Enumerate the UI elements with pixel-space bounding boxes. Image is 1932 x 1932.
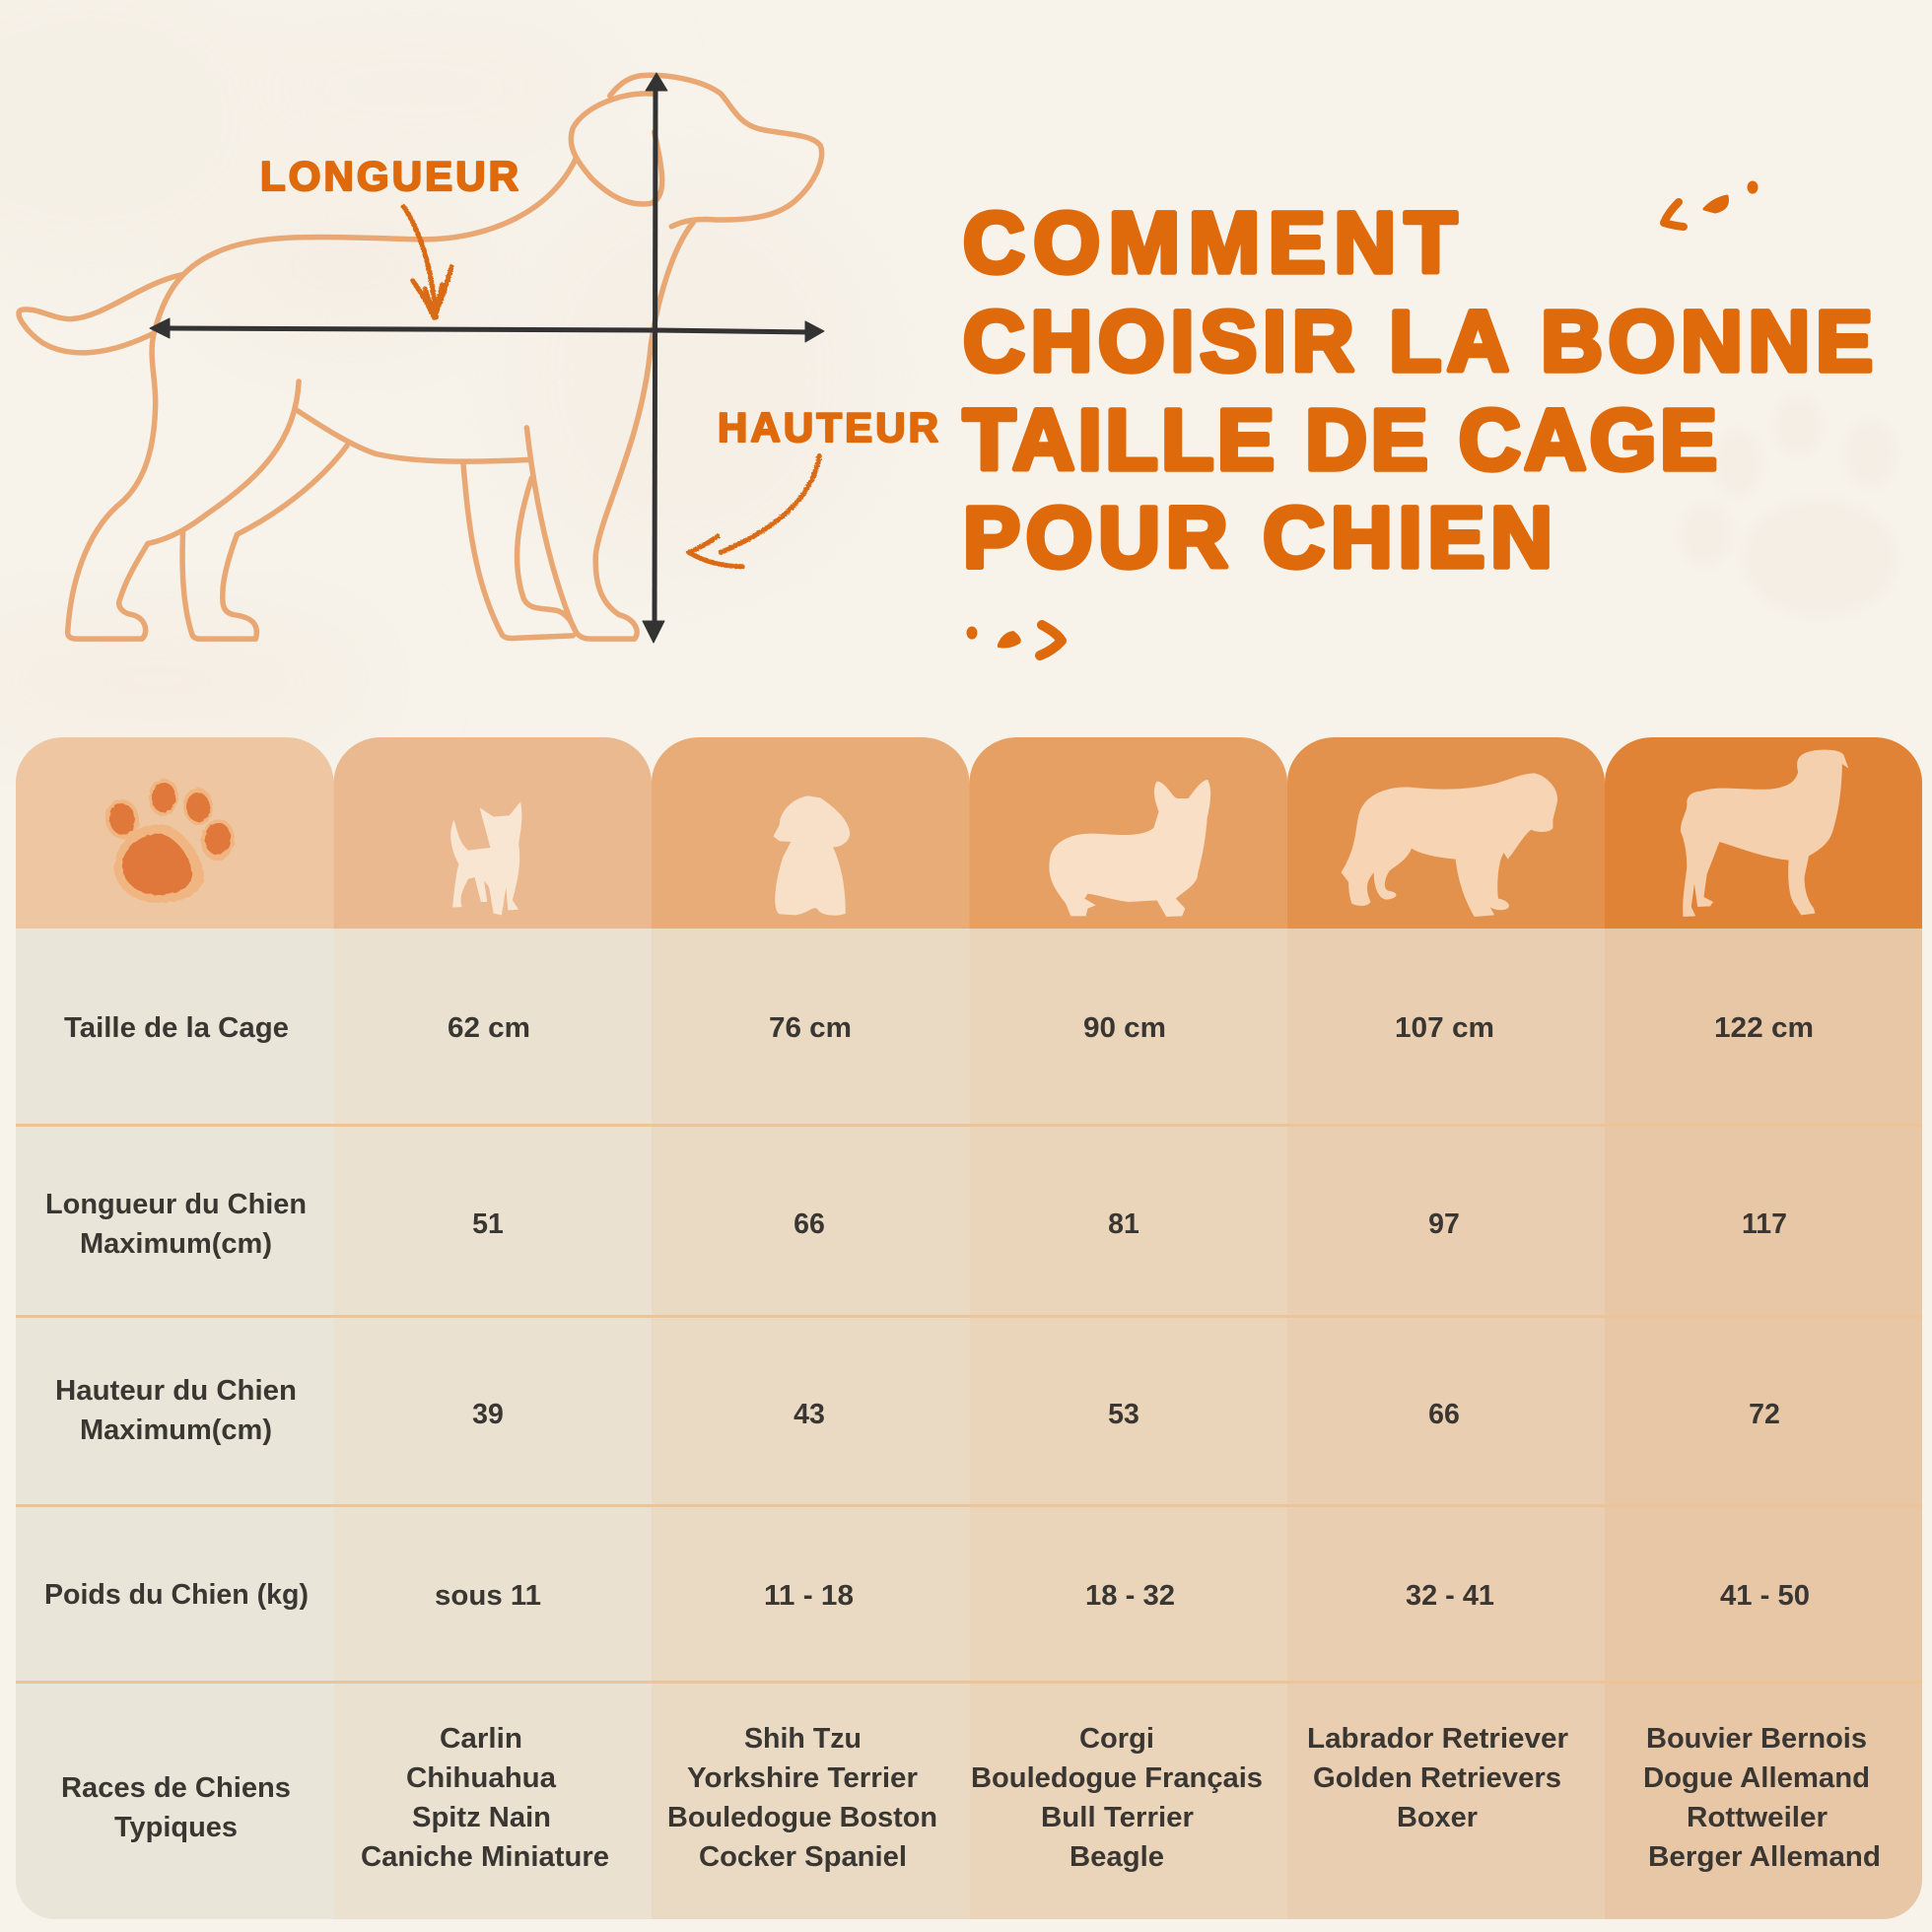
- decoration: bottom marks: [967, 625, 1062, 656]
- title: POUR CHIEN: [963, 490, 1552, 586]
- measurement arrows: [150, 73, 824, 643]
- header cell: labrador: [1287, 737, 1605, 929]
- decoration: top marks: [1664, 181, 1758, 227]
- row: races de chiens: Dogue Allemand: [1643, 1762, 1870, 1794]
- header cell: corgi: [970, 737, 1287, 929]
- row: poids du chien: sous 11: [435, 1580, 541, 1612]
- row: taille de la cage: 62 cm: [448, 1012, 530, 1044]
- row: races de chiens: Shih Tzu: [744, 1723, 862, 1755]
- row: races de chiens: Berger Allemand: [1648, 1841, 1881, 1873]
- header cell: large dog: [1605, 737, 1922, 929]
- icon: chihuahua silhouette: [450, 801, 521, 915]
- table header: [16, 737, 1922, 929]
- row: poids du chien: 41 - 50: [1720, 1580, 1810, 1612]
- row: races de chiens: Yorkshire Terrier: [687, 1762, 918, 1794]
- title: TAILLE DE CAGE: [963, 392, 1717, 488]
- row: taille de la cage: 76 cm: [769, 1012, 852, 1044]
- row: races de chiens: Beagle: [1070, 1841, 1164, 1873]
- row: longueur du chien: 117: [1742, 1208, 1787, 1240]
- arrow: hauteur: [689, 455, 819, 567]
- background paw watermark: [1680, 396, 1897, 617]
- row: longueur du chien: 97: [1428, 1208, 1460, 1240]
- title: [963, 195, 1873, 586]
- row: races de chiens: Corgi: [1079, 1723, 1154, 1755]
- row: hauteur du chien: 66: [1428, 1399, 1460, 1430]
- row: poids du chien: 18 - 32: [1085, 1580, 1175, 1612]
- icon: paw: [103, 778, 238, 903]
- row: hauteur du chien: [55, 1375, 1780, 1446]
- row: longueur du chien: 66: [794, 1208, 825, 1240]
- row: longueur du chien: [45, 1189, 1787, 1260]
- icon: large dog silhouette: [1681, 750, 1848, 917]
- row: poids du chien: 32 - 41: [1406, 1580, 1494, 1612]
- header cell: shih tzu: [652, 737, 970, 929]
- icon: corgi silhouette: [1049, 780, 1210, 917]
- row: poids du chien: 11 - 18: [764, 1580, 854, 1612]
- row: races de chiens: [61, 1723, 1881, 1873]
- row: taille de la cage: 90 cm: [1083, 1012, 1166, 1044]
- label: hauteur: HAUTEUR: [718, 404, 938, 450]
- header cell: paw: [16, 737, 334, 929]
- row: races de chiens: Boxer: [1397, 1802, 1478, 1833]
- row: races de chiens: Chihuahua: [406, 1762, 557, 1794]
- row: longueur du chien: Longueur du Chien: [45, 1189, 307, 1220]
- row: races de chiens: Bouledogue Français: [971, 1762, 1263, 1794]
- row: hauteur du chien: 39: [472, 1399, 504, 1430]
- row: races de chiens: Bull Terrier: [1041, 1802, 1194, 1833]
- title: CHOISIR LA BONNE: [963, 294, 1873, 389]
- row: poids du chien: [44, 1579, 1810, 1612]
- row: longueur du chien: 51: [472, 1208, 504, 1240]
- row: hauteur du chien: Hauteur du Chien: [55, 1375, 297, 1407]
- row: taille de la cage: 122 cm: [1714, 1012, 1814, 1044]
- row: races de chiens: Bouledogue Boston: [667, 1802, 937, 1833]
- title: COMMENT: [963, 195, 1457, 291]
- row: races de chiens: Labrador Retriever: [1307, 1723, 1568, 1755]
- row: races de chiens: Cocker Spaniel: [699, 1841, 907, 1873]
- row: races de chiens: Bouvier Bernois: [1646, 1723, 1867, 1755]
- row: races de chiens: Rottweiler: [1687, 1802, 1828, 1833]
- label: longueur: LONGUEUR: [260, 153, 518, 199]
- row: taille de la cage: Taille de la Cage: [64, 1012, 289, 1044]
- row: races de chiens: Caniche Miniature: [361, 1841, 609, 1873]
- row: hauteur du chien: 43: [794, 1399, 825, 1430]
- row: taille de la cage: 107 cm: [1395, 1012, 1494, 1044]
- row: hauteur du chien: Maximum(cm): [80, 1414, 272, 1446]
- row: races de chiens: Spitz Nain: [412, 1802, 551, 1833]
- arrow: longueur: [403, 206, 451, 317]
- row: hauteur du chien: 72: [1749, 1399, 1780, 1430]
- row: races de chiens: Races de Chiens: [61, 1772, 291, 1804]
- row: poids du chien: Poids du Chien (kg): [44, 1579, 309, 1611]
- icon: labrador silhouette: [1342, 773, 1557, 917]
- row: longueur du chien: 81: [1108, 1208, 1139, 1240]
- dog outline diagram: [19, 75, 822, 639]
- table body columns: [16, 929, 1922, 1919]
- row: hauteur du chien: 53: [1108, 1399, 1139, 1430]
- row: taille de la cage: [64, 1012, 1814, 1044]
- header cell: small dog: [333, 737, 652, 929]
- row: races de chiens: Golden Retrievers: [1313, 1762, 1561, 1794]
- row: races de chiens: Typiques: [114, 1812, 238, 1843]
- row: races de chiens: Carlin: [440, 1723, 522, 1755]
- icon: shih tzu silhouette: [773, 795, 850, 916]
- row: longueur du chien: Maximum(cm): [80, 1228, 272, 1260]
